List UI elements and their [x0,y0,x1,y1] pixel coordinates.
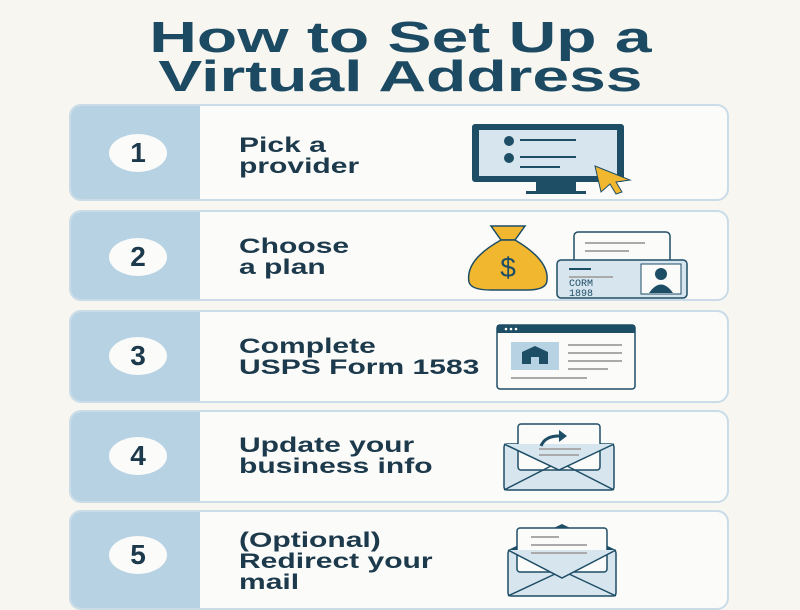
title: How to Set Up a [149,13,651,62]
label 4: Update your [239,434,414,457]
number 2 [109,238,167,276]
label 5 [239,529,433,594]
label 5: Redirect your [239,550,433,573]
label 1 [239,134,359,178]
panel: step 3 [69,310,729,403]
title: Virtual Address [158,52,642,101]
icon: money bag and ID card: CORM [569,279,593,290]
label 5: mail [239,571,299,594]
panel: step 4 [69,410,729,503]
label 1: provider [239,155,359,178]
label 2: Choose [239,235,349,258]
number 5 [109,536,167,574]
icon: monitor [472,124,632,195]
number 1: 1 [130,137,146,168]
icon: money bag and ID card [468,225,688,300]
panel: step 1 [69,104,729,201]
number 3 [109,337,167,375]
panel: step 2 [69,210,729,301]
label 3 [239,335,479,379]
icon: browser form [496,324,636,390]
label 4: business info [239,455,433,478]
icon: money bag and ID card: $ [500,252,516,283]
number 1 [109,134,167,172]
number 2: 2 [130,241,146,272]
label 4 [239,434,433,478]
label 2: a plan [239,256,326,279]
number 4 [109,437,167,475]
label 2 [239,235,349,279]
icon: money bag and ID card: 1898 [569,289,593,300]
panel: step 5 [69,510,729,610]
label 5: (Optional) [239,529,381,552]
number 4: 4 [130,440,146,471]
title [149,13,652,101]
label 3: USPS Form 1583 [239,356,479,379]
number 3: 3 [130,340,146,371]
label 3: Complete [239,335,376,358]
number 5: 5 [130,539,146,570]
icon: open envelope with letter [507,524,617,597]
icon: envelope with arrow [503,423,615,491]
label 1: Pick a [239,134,326,157]
